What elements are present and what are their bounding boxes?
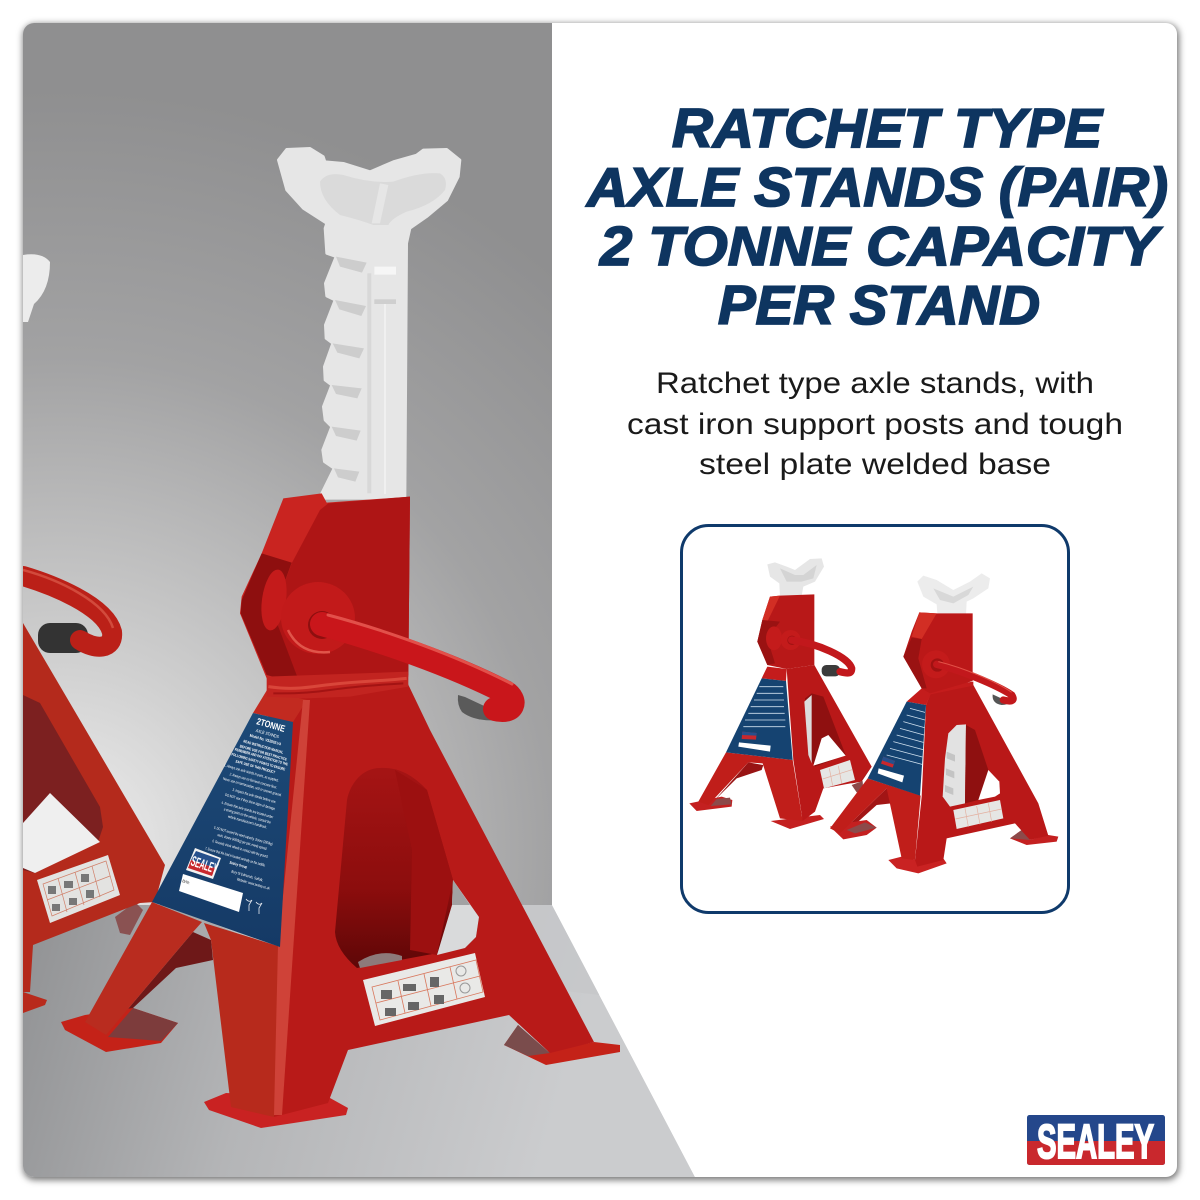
blue instruction label: READ INSTRUCTION MANUAL: [243, 739, 284, 755]
blue instruction label: 3. Inspect the axle stands before use.: [232, 787, 277, 804]
foot plates: [61, 1008, 178, 1052]
blue instruction label: AXLE STANDS: [255, 727, 280, 739]
title: AXLE STANDS (PAIR): [585, 156, 1168, 218]
blue instruction label: vehicle manufacturer's handbook.: [227, 814, 268, 830]
label logo: [186, 848, 221, 879]
rear leg: [847, 758, 872, 783]
label logo: SEALEY: [189, 854, 220, 878]
blue instruction label: DO NOT use if they show signs of damage.: [225, 792, 276, 811]
blue instruction label: 2TONNE: [255, 715, 287, 734]
blue instruction label: B/N:: [182, 878, 191, 885]
blue instruction label: Model No. VS2002.V4: [249, 733, 281, 747]
white saddle and ratchet post: [278, 148, 460, 498]
panel: product photo: [23, 23, 695, 1177]
blue instruction label: Website: www.sealey.co.uk: [236, 877, 271, 891]
icon: rear stand in inset: [689, 558, 872, 829]
description text: Ratchet type axle stands, with: [656, 367, 1094, 400]
blue instruction label: REMEMBER AND PAY ATTENTION TO THE: [234, 747, 289, 767]
blue instruction label: FOLLOWING SAFETY POINTS TO ENSURE: [231, 752, 286, 772]
window in the stand: [335, 768, 479, 968]
blue instruction label: BEFORE USE FOR BEST PRACTICE: [239, 744, 288, 762]
icon: rear axle stand cropped: [23, 254, 165, 1013]
height adjustment head: [240, 493, 410, 698]
edge highlight: [274, 700, 310, 1115]
stand body: [61, 682, 620, 1128]
blue instruction label: 5. DO NOT exceed the rated capacity, 2tonne (2000kg): [213, 825, 273, 847]
release handle: [322, 615, 513, 710]
blue instruction label: each, 4tonne (4000kg) per pair, evenly spread.: [217, 832, 268, 851]
blue instruction label: 1. Always use axle stands in pairs, as supplied.: [223, 763, 279, 783]
title: [585, 97, 1168, 336]
blue instruction label: 2. Always use on flat level concrete floor.: [229, 772, 278, 790]
icon: main axle stand: [61, 148, 620, 1128]
floor: [23, 905, 695, 1177]
title: 2 TONNE CAPACITY: [599, 215, 1163, 277]
blue instruction label: [152, 713, 293, 947]
blue instruction label: 7. Ensure that the load is located centrally on the saddle.: [205, 846, 266, 868]
grommet on handle: [458, 695, 492, 720]
panel: inset product image: [682, 526, 1068, 912]
blue instruction label: a strong point on the vehicle, consult the: [223, 807, 272, 825]
blue instruction label: SAFE USE OF THIS PRODUCT: [235, 759, 276, 775]
title: RATCHET TYPE: [672, 97, 1104, 159]
description text: [627, 367, 1123, 481]
left face: [253, 690, 307, 722]
right face: [267, 682, 594, 1117]
wall background: [23, 23, 552, 905]
blue instruction label: 4. Ensure that axle stands are located under: [221, 800, 274, 820]
blue instruction label: Sealey Group: [229, 860, 248, 870]
blue instruction label: Never use on tarmacadam, soft or uneven ground.: [222, 776, 282, 798]
description text: steel plate welded base: [699, 448, 1051, 481]
sticker: pictograms: [363, 953, 485, 1026]
washer: [281, 582, 355, 654]
blue instruction label: Bury St Edmunds, Suffolk.: [231, 869, 264, 883]
blue instruction label: 6. Securely chock wheels in contact with the ground.: [212, 839, 269, 859]
description text: cast iron support posts and tough: [627, 408, 1123, 441]
icon: front stand in inset: [830, 573, 1058, 873]
title: PER STAND: [718, 274, 1040, 336]
shadow leg: [128, 932, 213, 1009]
